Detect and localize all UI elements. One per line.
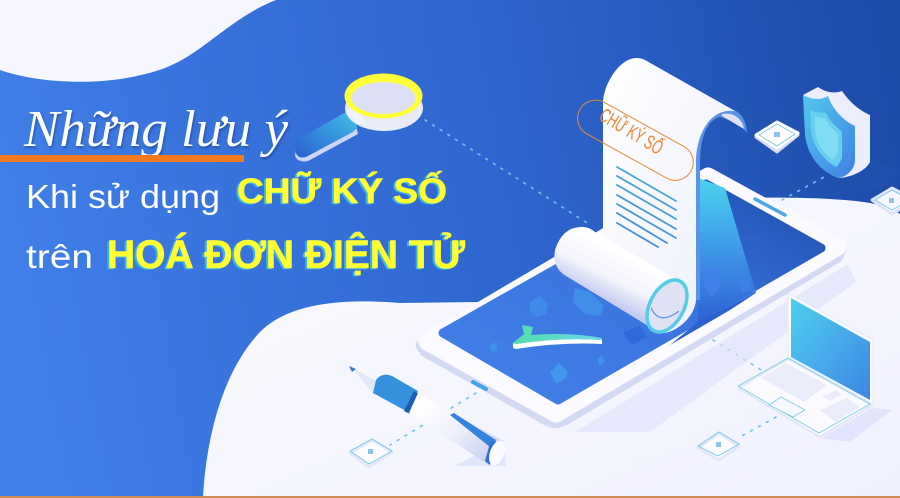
bottom white blob — [203, 198, 900, 498]
keyboard — [761, 363, 827, 402]
shield shadow — [840, 160, 900, 190]
handle shadow — [295, 122, 358, 161]
paper sheet — [603, 58, 735, 333]
floating crystals on screen — [489, 232, 762, 384]
pen shadow — [455, 440, 506, 466]
text lines on paper — [617, 167, 676, 247]
chip: near pen — [350, 439, 392, 467]
phone side — [420, 250, 842, 424]
yellow ring — [344, 74, 422, 118]
rubber stamp pill — [571, 94, 700, 187]
neck — [346, 104, 366, 125]
orange underline — [0, 155, 244, 162]
paper roll — [554, 227, 683, 327]
line two plain: Khi sử dụng — [26, 178, 220, 215]
shield icon — [803, 87, 900, 190]
laptop lid — [788, 293, 873, 404]
number pad — [820, 398, 860, 422]
chip: by shield — [756, 122, 798, 152]
trackpad — [769, 397, 805, 417]
small key block — [822, 390, 842, 401]
handle — [295, 111, 357, 158]
bottom edge line — [0, 496, 900, 498]
pen end — [486, 438, 508, 468]
phone body — [427, 176, 838, 414]
pen cap band — [404, 391, 419, 414]
pen end band — [485, 441, 496, 465]
scroll document — [554, 58, 747, 339]
laptop screen — [791, 298, 870, 400]
shield front — [803, 95, 855, 178]
top-left white blob — [0, 0, 276, 82]
pen icon — [349, 366, 508, 468]
heading text — [0, 101, 466, 277]
shield inner — [810, 110, 842, 167]
laptop base — [738, 359, 872, 437]
beam lower shade — [670, 293, 756, 345]
phone shadow — [575, 264, 856, 432]
pen cap blue — [373, 375, 418, 412]
shield side — [803, 87, 870, 178]
laptop shadow — [822, 408, 892, 442]
script title: Những lưu ý — [23, 101, 289, 158]
curl back edge — [692, 109, 747, 300]
roll end — [639, 273, 695, 339]
line three plain: trên — [26, 238, 93, 275]
base outline — [738, 358, 870, 433]
shield core — [815, 116, 838, 159]
check mark — [513, 325, 602, 349]
pen barrel — [409, 393, 503, 465]
bottom button pill — [473, 382, 486, 389]
curl underside — [722, 114, 744, 129]
dotted connector lines — [390, 120, 826, 445]
chip: top right — [872, 188, 900, 214]
line three highlight: HOÁ ĐƠN ĐIỆN TỬ — [107, 231, 466, 277]
lens glass — [352, 82, 416, 114]
phone — [420, 176, 856, 432]
magnifying glass icon — [295, 74, 423, 161]
stamp label: CHỮ KÝ SỐ — [595, 103, 668, 159]
chip: near laptop — [698, 432, 739, 460]
laptop icon — [738, 293, 892, 442]
lens thickness — [345, 85, 423, 131]
line two highlight: CHỮ KÝ SỐ — [237, 171, 447, 211]
pen clip — [450, 413, 496, 447]
nib — [349, 366, 356, 372]
phone screen — [443, 184, 821, 400]
pen tip — [351, 367, 378, 395]
top speaker pill — [755, 199, 785, 215]
screen light beam — [698, 178, 756, 322]
